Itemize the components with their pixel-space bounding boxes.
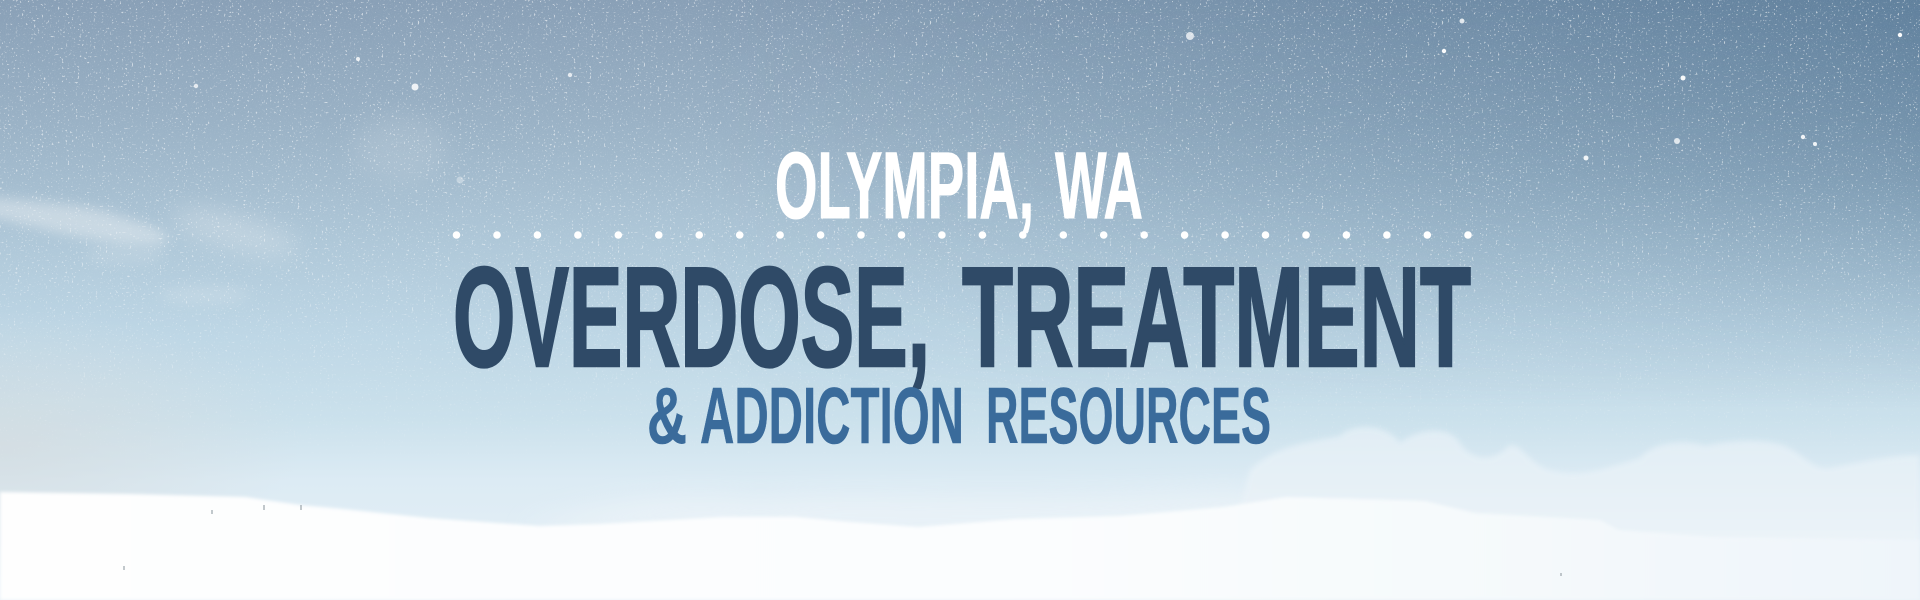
title: subheading: ADDICTION <box>700 371 964 460</box>
title: main heading: OVERDOSE, <box>453 238 930 397</box>
distant cloud bank <box>520 427 1920 545</box>
snowy ground <box>0 492 1920 600</box>
title: main heading: TREATMENT <box>962 238 1471 397</box>
wispy clouds <box>0 114 448 304</box>
dotted divider <box>453 231 1472 239</box>
snow speckle texture <box>0 0 1920 410</box>
title: city: OLYMPIA, <box>775 133 1034 239</box>
title: city: WA <box>1055 133 1143 239</box>
title: subheading: RESOURCES <box>986 371 1271 460</box>
title: subheading: & <box>647 371 687 460</box>
